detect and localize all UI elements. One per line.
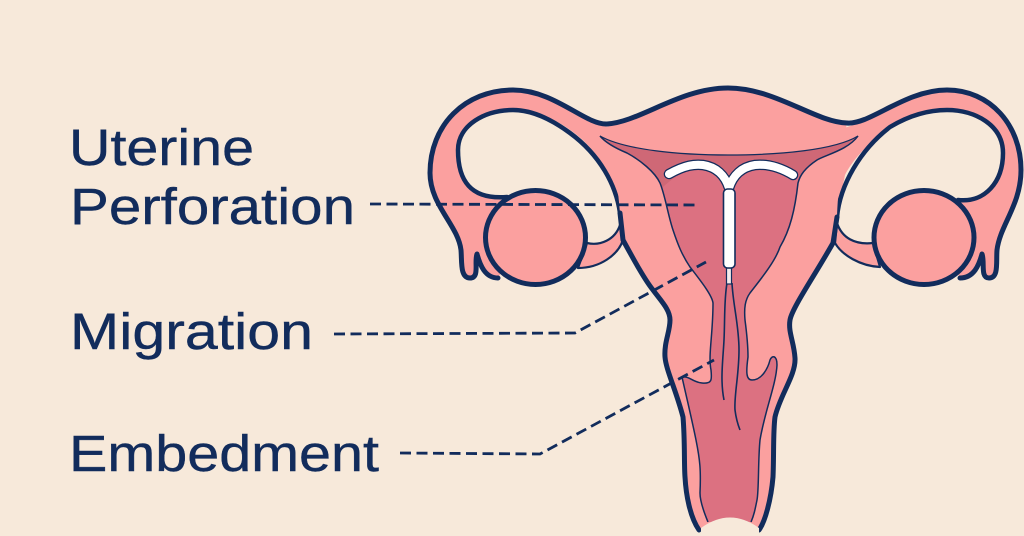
dashed leader: embedment xyxy=(400,360,714,454)
right ovary xyxy=(874,190,974,284)
IUD stem xyxy=(724,189,735,268)
left ovarian ligament xyxy=(578,225,623,268)
uterine body and cervix xyxy=(607,88,847,530)
cavity outline left xyxy=(600,136,713,522)
IUD stem tip xyxy=(726,268,732,284)
right ovarian ligament xyxy=(835,223,880,267)
cavity top line xyxy=(600,136,858,155)
label: embedment: Embedment xyxy=(69,425,379,482)
left ovary xyxy=(486,190,586,284)
dashed leader: uterine perforation xyxy=(370,204,698,205)
label: uterine perforation xyxy=(69,119,355,235)
label: migration: Migration xyxy=(70,303,313,360)
IUD device xyxy=(669,165,793,430)
left fallopian tube xyxy=(430,90,620,278)
uterine cavity xyxy=(600,136,858,522)
label: uterine perforation: Perforation xyxy=(70,178,355,235)
anatomical illustration of uterus xyxy=(430,88,1022,536)
upper cavity shading xyxy=(601,137,857,190)
right fallopian tube xyxy=(835,90,1022,278)
label: uterine perforation: Uterine xyxy=(69,119,254,176)
cavity outline right xyxy=(745,136,858,522)
IUD strings xyxy=(722,283,727,400)
dashed leader: migration xyxy=(334,262,706,334)
IUD arms xyxy=(669,165,793,188)
vaginal opening xyxy=(701,518,759,536)
